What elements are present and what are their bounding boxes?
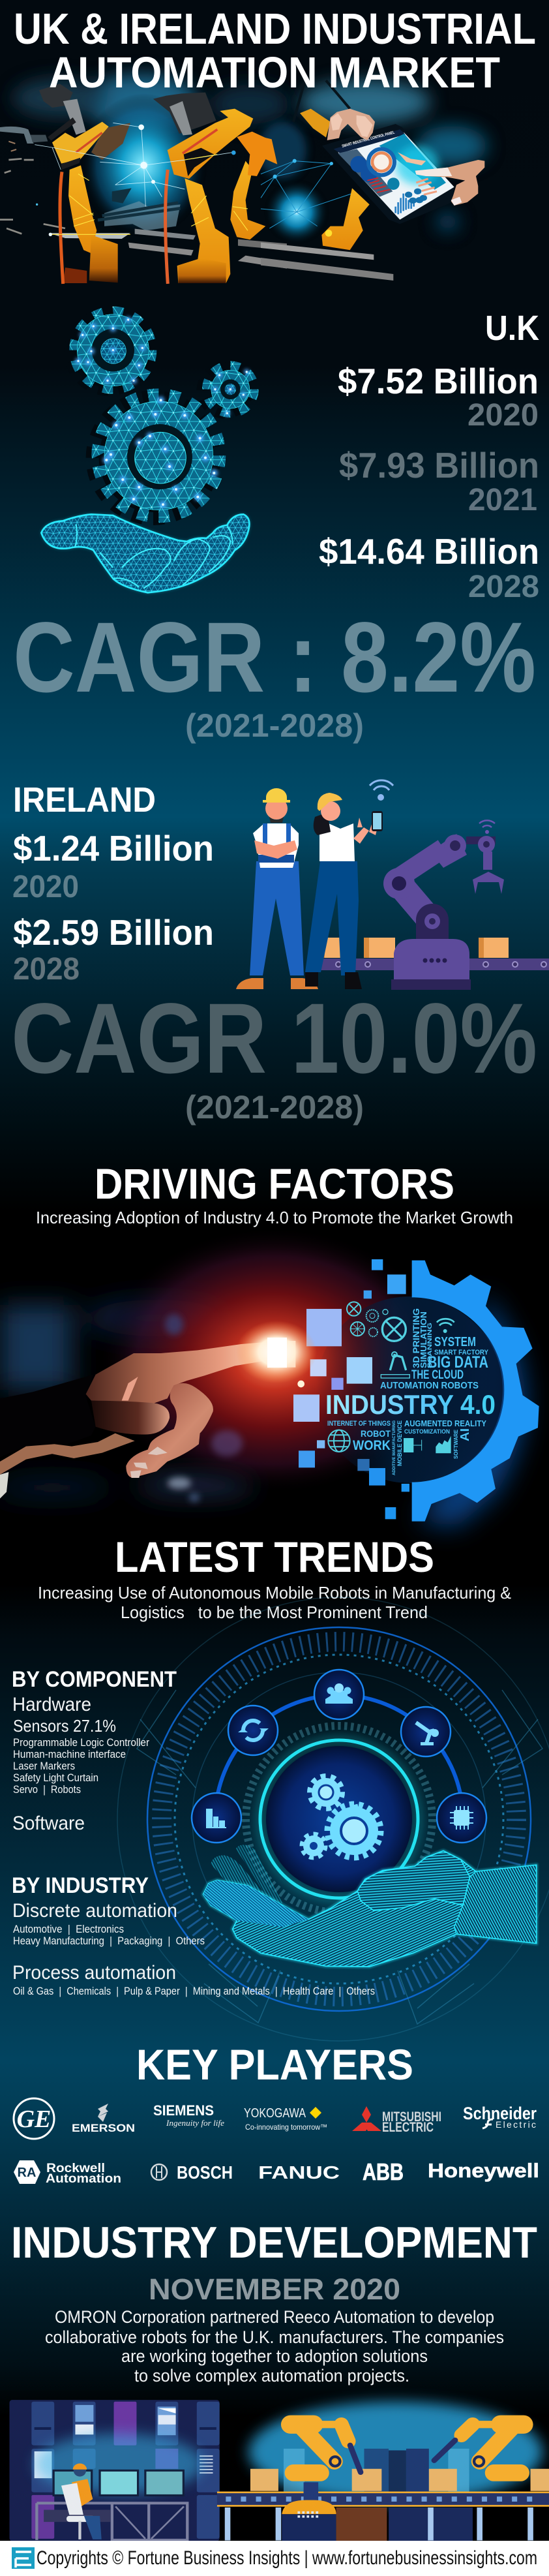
icon: robot arm <box>401 1707 451 1756</box>
text panel: by industry: Automotive | Electronics <box>13 1923 124 1935</box>
logo: Fortune Business Insights <box>12 2547 35 2569</box>
heading: driving factors: DRIVING FACTORS <box>95 1159 454 1208</box>
logo: Siemens: Ingenuity for life <box>166 2118 224 2128</box>
logo: Rockwell Automation: RA <box>18 2166 36 2180</box>
female worker <box>305 780 393 989</box>
front finger <box>203 1880 308 1927</box>
hero left part: robots and glow <box>0 74 306 284</box>
blue gear <box>412 1261 539 1522</box>
logo: Emerson: EMERSON <box>72 2122 135 2134</box>
heading: key players: KEY PLAYERS <box>136 2040 413 2089</box>
icon: mesh gears in a wireframe hand <box>41 311 254 592</box>
boxes <box>250 2469 549 2491</box>
heading: latest trends: Increasing Use of Autonomous Mobile Robots in Manufacturing & <box>38 1583 511 1602</box>
illustration: control room and robot assembly line <box>9 2400 549 2541</box>
back fingers <box>211 1845 282 1912</box>
development paragraph: OMRON Corporation partnered Reeco Automation to develop <box>55 2307 494 2327</box>
network nodes <box>273 159 333 179</box>
U.K statistics: 2021 <box>468 483 537 517</box>
Industry 4.0 word cloud: MOBILE DEVICE <box>396 1420 403 1466</box>
robot arm 2 <box>153 93 253 284</box>
U.K statistics: U.K <box>485 309 539 348</box>
logo: Schneider Electric: Electric <box>496 2119 536 2130</box>
factory panels <box>284 2449 473 2541</box>
icon: refresh <box>228 1706 278 1755</box>
cables <box>293 80 350 122</box>
control room wall <box>9 2400 220 2541</box>
logo: ABB: ABB <box>363 2158 404 2185</box>
desk <box>37 2503 187 2540</box>
network glow <box>264 179 329 245</box>
hand pointing at tablet <box>415 160 484 206</box>
hand on tablet top <box>327 109 375 140</box>
development paragraph: to solve complex automation projects. <box>134 2366 409 2385</box>
text panel: by industry: Heavy Manufacturing | Packaging | Others <box>13 1935 205 1947</box>
logo: GE <box>14 2098 54 2139</box>
Industry 4.0 word cloud: SYSTEM <box>434 1335 476 1349</box>
logo: Rockwell Automation <box>14 2160 121 2186</box>
Ireland CAGR: (2021-2028) <box>185 1089 364 1126</box>
operator <box>44 2464 110 2539</box>
Ireland statistics: 2028 <box>13 952 80 987</box>
Industry 4.0 word cloud: ADDITIVE MANUFACTURING <box>393 1420 396 1475</box>
Industry 4.0 word cloud: AI <box>458 1428 471 1441</box>
red glow <box>98 1227 450 1494</box>
Industry 4.0 word cloud: INTERNET OF THINGS <box>327 1420 391 1428</box>
Industry 4.0 word cloud: WORK <box>353 1438 391 1453</box>
hero right part: tablet and hands <box>261 80 487 281</box>
dark background blobs <box>0 1300 254 1497</box>
text panel: by component: Servo | Robots <box>13 1783 81 1796</box>
text panel: by component: Laser Markers <box>13 1760 75 1772</box>
tablet <box>322 124 454 224</box>
U.K statistics: $7.52 Billion <box>338 361 539 401</box>
crate <box>336 2507 387 2541</box>
word cloud icons <box>328 1302 454 1453</box>
logos row 1 <box>14 2098 537 2139</box>
node lights <box>36 125 277 236</box>
icon: bar chart <box>192 1793 241 1843</box>
monitors <box>53 2470 185 2496</box>
network lines <box>35 123 233 207</box>
Industry 4.0 word cloud: SOFTWARE <box>453 1429 459 1459</box>
gear small right <box>201 366 254 414</box>
logo: Yokogawa: Co-innovating tomorrow™ <box>245 2123 327 2132</box>
development paragraph: collaborative robots for the U.K. manufacturers. The companies <box>45 2327 504 2347</box>
date: November 2020: NOVEMBER 2020 <box>149 2273 400 2306</box>
heading: driving factors <box>36 1159 513 1227</box>
logos row 2 <box>14 2158 539 2186</box>
Industry 4.0 word cloud: INDUSTRY 4.0 <box>325 1389 496 1420</box>
text panel: by industry: Oil & Gas | Chemicals | Pulp & Paper | Mining and Metals | Health Care | Others <box>13 1985 375 1997</box>
text panel: by component: Human-machine interface <box>13 1748 126 1760</box>
floating squares <box>287 1259 409 1519</box>
wireframe hand <box>41 514 249 592</box>
icon: team <box>314 1670 364 1719</box>
left robot arm <box>291 2425 361 2473</box>
logo: Yokogawa <box>244 2106 327 2132</box>
male worker <box>236 788 318 989</box>
logo: Schneider Electric <box>463 2104 537 2130</box>
robot base <box>282 2482 336 2541</box>
development paragraph: are working together to adoption solutions <box>121 2346 428 2366</box>
U.K statistics <box>319 309 539 604</box>
wrist stripes <box>454 1865 537 1943</box>
Industry 4.0 word cloud <box>325 1308 496 1475</box>
footer bar <box>0 2541 549 2576</box>
Ireland statistics: $2.59 Billion <box>13 912 214 953</box>
Industry 4.0 word cloud: AUTOMATION ROBOTS <box>380 1380 479 1391</box>
U.K statistics: $14.64 Billion <box>319 531 539 572</box>
hand pointing <box>0 1342 267 1499</box>
network lines <box>261 161 352 228</box>
title <box>14 5 536 97</box>
boxes <box>319 938 509 958</box>
left machinery <box>0 127 65 234</box>
text panel: by industry <box>12 1873 375 1997</box>
blue arc ring <box>215 1695 463 1943</box>
text panel: by component: Programmable Logic Controller <box>13 1736 149 1749</box>
U.K CAGR: (2021-2028) <box>185 707 364 744</box>
background haze <box>300 80 487 230</box>
logo: Rockwell Automation: Automation <box>46 2172 121 2186</box>
logo: Mitsubishi Electric: MITSUBISHI <box>382 2109 441 2124</box>
Industry 4.0 word cloud: AUGMENTED REALITY <box>404 1418 486 1428</box>
hero image: finger touching Industry 4.0 gear <box>0 1227 539 1527</box>
Industry 4.0 word cloud: CUSTOMIZATION <box>404 1428 450 1435</box>
Ireland statistics: $1.24 Billion <box>13 828 214 868</box>
Industry 4.0 word cloud: 3D PRINTING <box>411 1308 421 1368</box>
conveyor <box>217 2492 549 2540</box>
illustration: automation dial with gears and wireframe hand <box>117 1597 549 2041</box>
background haze <box>13 74 289 130</box>
heading: latest trends: LATEST TRENDS <box>115 1533 434 1581</box>
logo: Honeywell: Honeywell <box>428 2159 539 2182</box>
Industry 4.0 word cloud: SCANNING <box>426 1323 433 1368</box>
robot arm 3 parts <box>261 109 370 250</box>
logo: Mitsubishi Electric: ELECTRIC <box>382 2120 434 2135</box>
logo: Schneider Electric: Schneider <box>463 2104 537 2123</box>
development paragraph <box>45 2307 504 2385</box>
text panel: by component: Software <box>12 1813 85 1834</box>
gear sparkles core <box>77 318 248 506</box>
Industry 4.0 word cloud: BIG DATA <box>428 1353 488 1372</box>
faint outer rings <box>117 1597 549 2041</box>
conveyor belt <box>312 958 549 970</box>
blue gear glow <box>417 1292 525 1527</box>
illustration: workers and robot on conveyor <box>236 780 549 990</box>
heading: latest trends: Logistics to be the Most Prominent Trend <box>121 1602 428 1622</box>
Ireland statistics <box>12 780 214 987</box>
Ireland statistics: 2020 <box>12 870 79 904</box>
icon: chip <box>437 1793 486 1843</box>
right robot arm <box>434 2425 524 2473</box>
hand glow <box>203 1851 537 1967</box>
text panel: by component: BY COMPONENT <box>12 1667 177 1692</box>
Industry 4.0 word cloud: ROBOT <box>361 1428 391 1439</box>
gear dark face <box>316 1296 503 1483</box>
Industry 4.0 word cloud: SIMULATION <box>419 1311 428 1368</box>
text panel: by component <box>12 1667 177 1834</box>
thumb <box>357 1851 470 1910</box>
purple bokeh <box>165 1314 243 1502</box>
logo: Yokogawa: YOKOGAWA <box>244 2106 306 2121</box>
central gears <box>302 1776 380 1858</box>
gear sparkles halo <box>75 316 249 508</box>
logo: Bosch <box>151 2162 233 2183</box>
Industry 4.0 word cloud: THE CLOUD <box>411 1368 464 1382</box>
gear top left <box>69 311 152 391</box>
robot arm <box>383 820 504 990</box>
factory glow <box>248 2402 542 2502</box>
hero image: robot arms and tablet <box>0 74 487 284</box>
control room glow <box>35 2434 203 2494</box>
U.K statistics: $7.93 Billion <box>339 445 539 485</box>
title: AUTOMATION MARKET <box>49 48 500 97</box>
wireframe hand <box>203 1845 537 1967</box>
robot arm 1 <box>39 84 130 284</box>
text panel: by component: Safety Light Curtain <box>13 1771 98 1784</box>
background machinery <box>98 188 181 230</box>
text panel: by component: Sensors 27.1% <box>13 1716 116 1736</box>
text panel: by industry: Discrete automation <box>12 1900 177 1922</box>
U.K statistics: 2028 <box>468 570 539 604</box>
hot touch point <box>236 1321 317 1383</box>
light glows <box>81 93 306 237</box>
yellow light streaks <box>49 155 248 234</box>
logo: Bosch: BOSCH <box>177 2162 233 2183</box>
logo: Siemens: SIEMENS <box>153 2102 214 2119</box>
logo: GE: GE <box>17 2106 51 2133</box>
text panel: by industry: BY INDUSTRY <box>12 1873 149 1898</box>
conveyor rails <box>49 229 287 269</box>
tablet: SMART INDUSTRIAL CONTROL PANEL <box>342 130 395 149</box>
gear large <box>93 395 219 518</box>
U.K statistics: 2020 <box>467 398 539 433</box>
logo: Rockwell Automation: Rockwell <box>46 2162 105 2175</box>
central disc <box>260 1740 418 1898</box>
text panel: by industry: Process automation <box>12 1962 176 1984</box>
heading: latest trends <box>38 1533 511 1622</box>
logo: Emerson <box>72 2104 135 2134</box>
text panel: by component: Hardware <box>12 1694 91 1715</box>
palm and wrist <box>203 1851 537 1967</box>
conveyor rails <box>261 243 393 281</box>
heading: driving factors: Increasing Adoption of Industry 4.0 to Promote the Market Growth <box>36 1208 513 1227</box>
Ireland statistics: IRELAND <box>13 780 156 820</box>
Industry 4.0 word cloud: SMART FACTORY <box>434 1349 489 1357</box>
robot arm 3 <box>230 132 277 239</box>
logo: Mitsubishi Electric <box>352 2106 441 2135</box>
logo: Siemens <box>153 2102 224 2128</box>
logo: Fanuc: FANUC <box>258 2162 340 2183</box>
